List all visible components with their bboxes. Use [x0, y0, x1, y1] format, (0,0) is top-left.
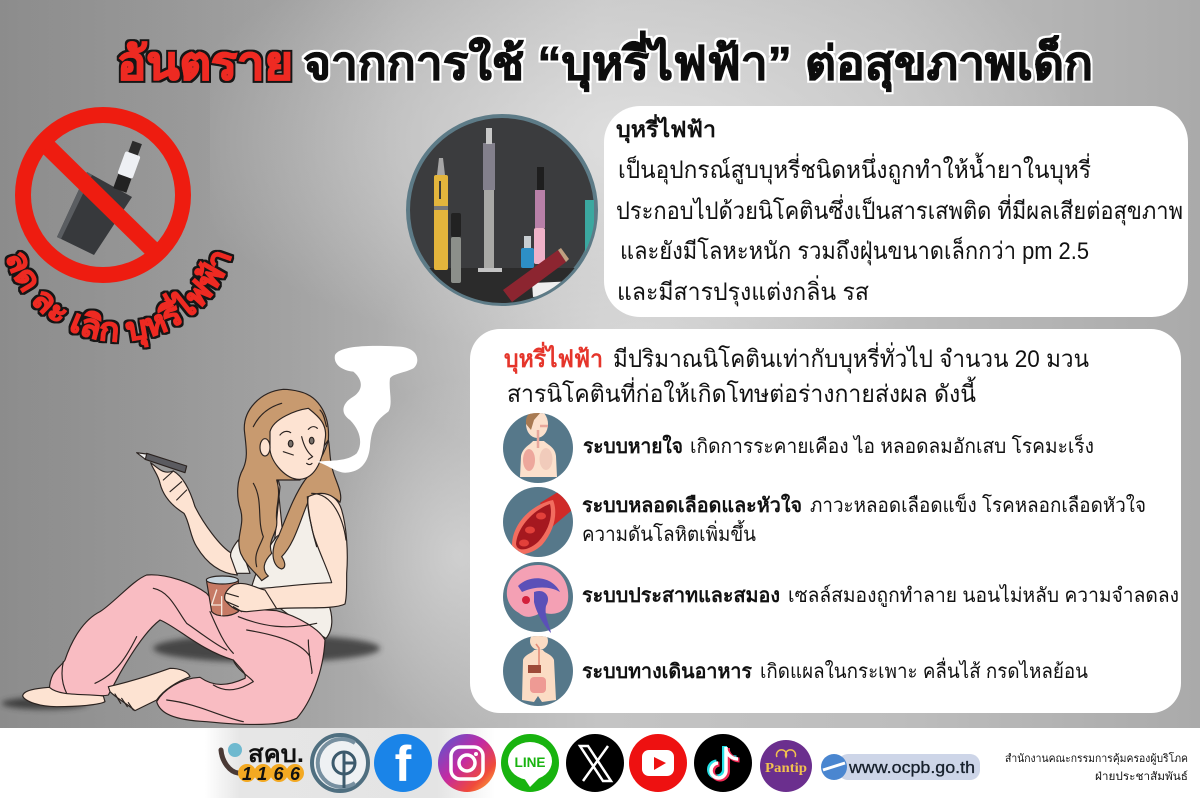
panel intro text: มีปริมาณนิโคตินเท่ากับบุหรี่ทั่วไป จำนวน 20 มวน — [613, 342, 1089, 374]
logo: OCPB — [312, 735, 368, 791]
row text: digestive — [582, 657, 1088, 683]
icon: respiratory system — [503, 410, 573, 483]
website badge — [821, 754, 980, 780]
icon: YouTube — [629, 734, 687, 792]
department credit — [1005, 751, 1188, 783]
row text: cardiovascular: ระบบหลอดเลือดและหัวใจ — [582, 493, 802, 517]
slogan curved text: ลด ละ เลิก บุหรี่ไฟฟ้า — [4, 250, 234, 350]
title: อันตราย — [117, 37, 293, 89]
icon: instagram — [438, 734, 496, 792]
department credit: สำนักงานคณะกรรมการคุ้มครองผู้บริโภค — [1005, 751, 1188, 765]
panel text: และมีสารปรุงแต่งกลิ่น รส — [617, 275, 869, 307]
department credit: ฝ่ายประชาสัมพันธ์ — [1095, 770, 1188, 783]
icon: TikTok — [694, 734, 752, 792]
icon: facebook — [374, 734, 432, 792]
icon: digestive system — [503, 632, 573, 706]
footer band — [0, 728, 1200, 800]
icon: X — [566, 734, 624, 792]
panel text: เป็นอุปกรณ์สูบบุหรี่ชนิดหนึ่งถูกทำให้น้ำยาในบุหรี่ — [618, 152, 1091, 185]
icon: LINE — [501, 734, 559, 792]
row text: digestive: เกิดแผลในกระเพาะ คลื่นไส้ กรดไหลย้อน — [760, 657, 1088, 683]
row text: respiratory: ระบบหายใจ — [583, 434, 683, 458]
panel: what is an e-cigarette — [604, 106, 1188, 317]
icon: facebook: f — [395, 736, 412, 792]
row text: nervous system: ระบบประสาทและสมอง — [582, 585, 780, 607]
website badge: www.ocpb.go.th — [848, 758, 975, 777]
panel intro text: สารนิโคตินที่ก่อให้เกิดโทษต่อร่างกายส่งผล ดังนี้ — [507, 376, 976, 408]
icon: Pantip: Pantip — [765, 761, 807, 776]
illustration: woman vaping — [2, 346, 417, 724]
photo: e-cigarette devices — [408, 116, 598, 308]
logo: hotline 1166 — [221, 741, 304, 784]
row text: respiratory — [583, 433, 1094, 458]
title — [117, 31, 1093, 92]
row text: cardiovascular — [582, 492, 1146, 546]
icon: Pantip — [760, 740, 812, 792]
logo: hotline 1166: สคบ. — [248, 741, 304, 768]
row text: nervous system — [582, 584, 1179, 608]
logo: hotline 1166: 1166 — [242, 764, 301, 784]
icon: no vaping sign — [23, 115, 183, 275]
row text: respiratory: เกิดการระคายเคือง ไอ หลอดลมอักเสบ โรคมะเร็ง — [690, 433, 1094, 458]
panel text: และยังมีโลหะหนัก รวมถึงฝุ่นขนาดเล็กกว่า pm 2.5 — [620, 236, 1089, 266]
icon: blood vessel — [503, 487, 578, 557]
panel intro text: บุหรี่ไฟฟ้า — [504, 341, 603, 375]
panel: health effects — [470, 329, 1181, 713]
panel heading: บุหรี่ไฟฟ้า — [616, 113, 716, 144]
row text: cardiovascular: ความดันโลหิตเพิ่มขึ้น — [582, 520, 756, 546]
row text: digestive: ระบบทางเดินอาหาร — [582, 661, 752, 683]
icon: brain — [503, 562, 573, 633]
panel text — [616, 152, 1183, 307]
icon: LINE: LINE — [514, 754, 546, 770]
panel intro text — [504, 341, 1089, 408]
row text: cardiovascular: ภาวะหลอดเลือดแข็ง โรคหลอกเลือดหัวใจ — [810, 492, 1146, 517]
row text: nervous system: เซลล์สมองถูกทำลาย นอนไม่หลับ ความจำลดลง — [788, 584, 1179, 608]
title: จากการใช้ “บุหรี่ไฟฟ้า” ต่อสุขภาพเด็ก — [303, 31, 1093, 92]
